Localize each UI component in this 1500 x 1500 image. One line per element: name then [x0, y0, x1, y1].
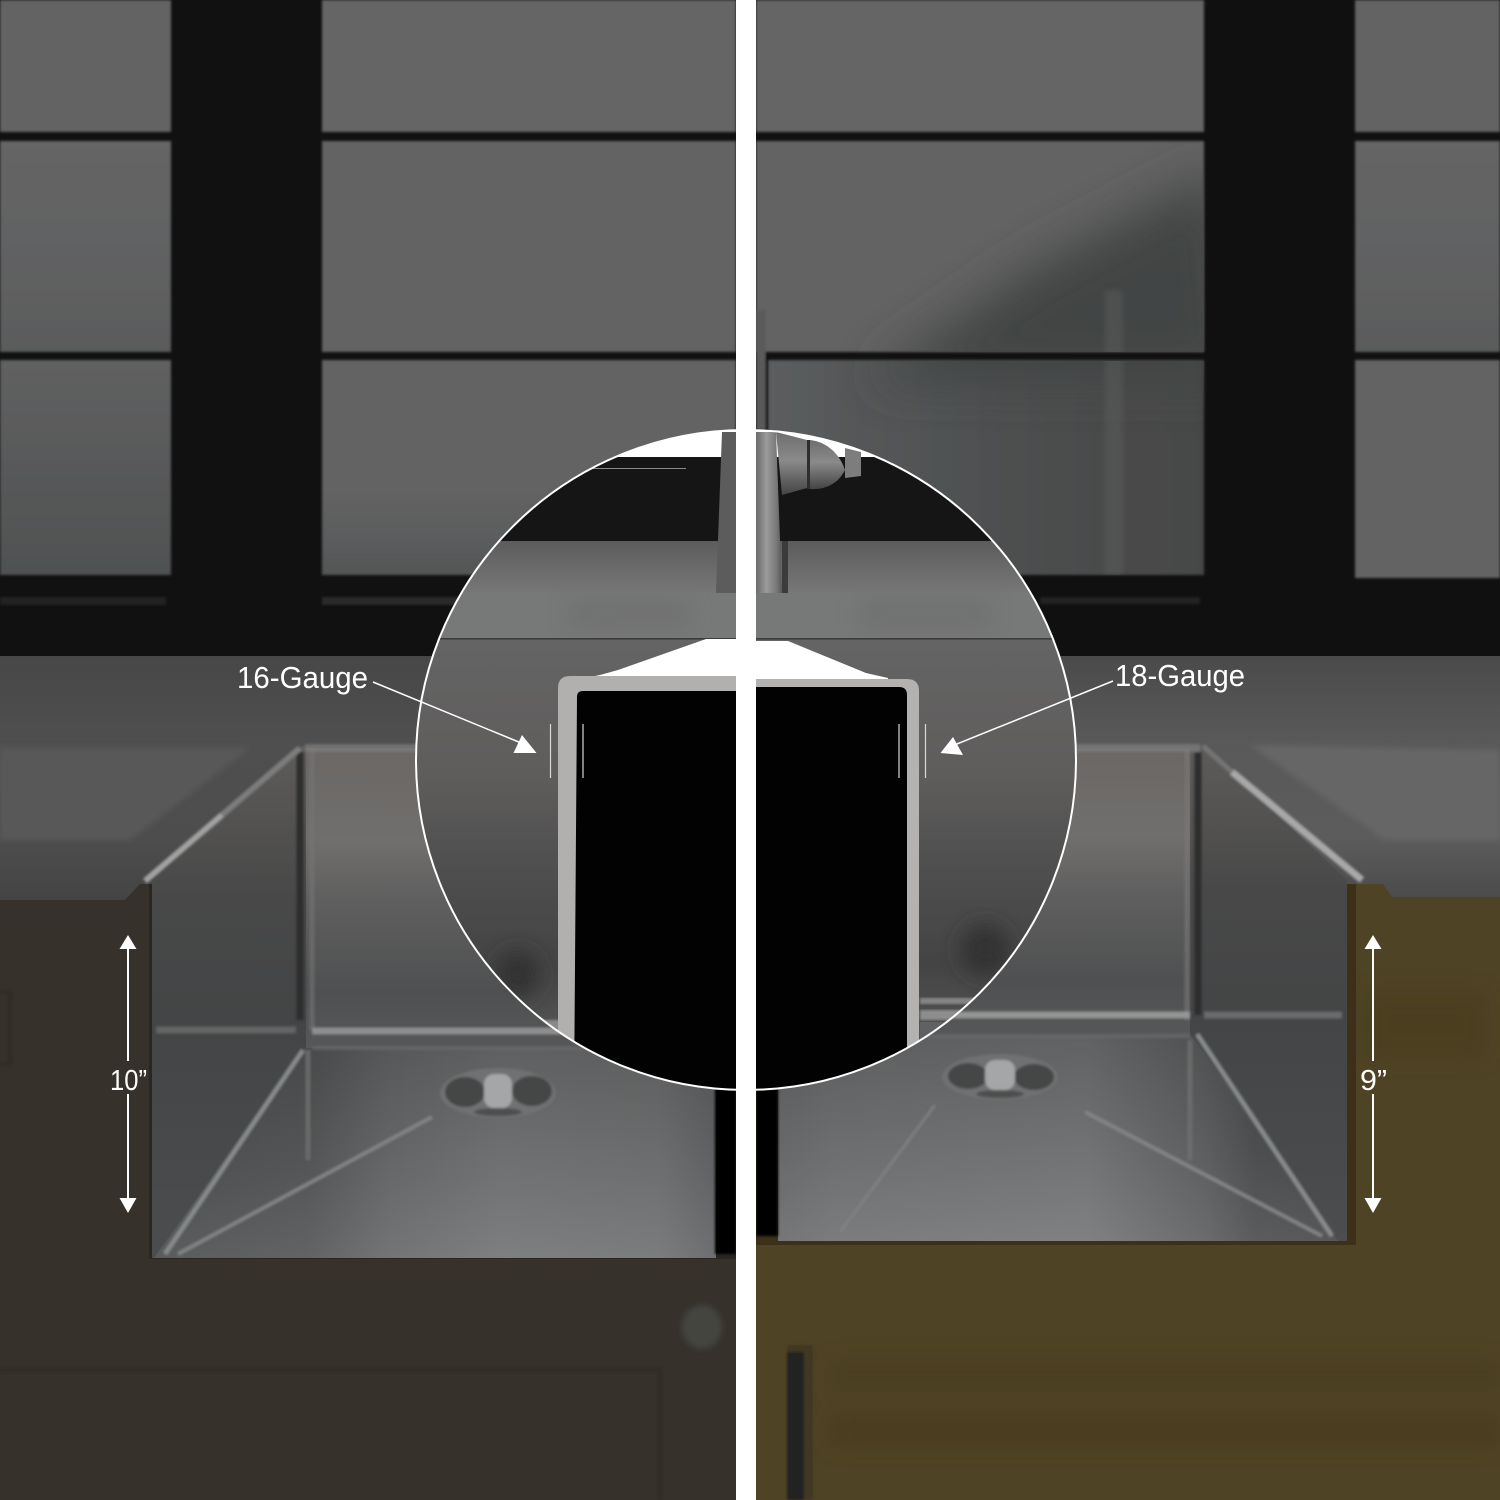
sink side wall [152, 746, 306, 1258]
arrow: 16-gauge pointer [373, 682, 536, 753]
countertop [1060, 656, 1500, 897]
dimension: 9 inch depth: 9” [1360, 1065, 1387, 1097]
sink back wall [929, 751, 1190, 1036]
arrow: 18-gauge pointer [940, 681, 1113, 755]
lens base fill [440, 640, 1052, 641]
thickness tick marks [550, 724, 926, 778]
cabinet grain [830, 992, 1500, 1447]
sink floor [154, 1048, 716, 1258]
16-gauge cross-section wall [558, 676, 736, 1100]
center divider [736, 0, 756, 1500]
faucet behind lens [756, 310, 766, 430]
dimension: 10 inch depth: 10” [110, 1065, 147, 1097]
scene: right half, 18-gauge kitchen [756, 0, 1500, 1500]
sink side wall [1190, 745, 1347, 1241]
faucet fitting [776, 432, 861, 495]
window frame [0, 0, 736, 665]
window reflection shadow [896, 170, 1204, 575]
lens counter texture [570, 600, 990, 628]
sink drain [440, 1068, 556, 1118]
lens sink rim details [420, 998, 1070, 1094]
dimension: 9 inch depth [1360, 935, 1387, 1213]
cabinet recessed panel [10, 992, 660, 1372]
countertop [0, 656, 432, 900]
faucet stem, left half [716, 432, 736, 593]
sink drain [942, 1054, 1058, 1100]
cabinet knob [682, 1305, 722, 1349]
sink cutout, 9 inch deep [756, 745, 1362, 1245]
magnifier lens: cross-section close-up [416, 430, 1076, 1100]
callout: 16-Gauge [237, 660, 536, 753]
faucet stem, right half [756, 432, 782, 593]
callout: 16-Gauge: 16-Gauge [237, 660, 368, 695]
cabinet handle [787, 1345, 813, 1500]
sink back wall [306, 748, 582, 1048]
sink floor [778, 1036, 1338, 1241]
lower cabinet [0, 884, 736, 1500]
lens white top cap [618, 431, 874, 457]
window frame [756, 0, 1500, 665]
lens lower wall [416, 640, 1076, 1090]
lens upper highlight line [590, 468, 686, 469]
window panes [0, 0, 736, 605]
dimension: 10 inch depth [110, 935, 147, 1213]
sink rim flange: white wedge [575, 639, 736, 680]
sink seams [142, 743, 582, 1256]
countertop highlight [0, 748, 250, 840]
callout: 18-Gauge: 18-Gauge [1115, 658, 1245, 693]
18-gauge cross-section wall [756, 679, 919, 1100]
sink cutout, 10 inch deep [145, 746, 736, 1259]
lower cabinet, oak [756, 884, 1500, 1500]
countertop highlight [1250, 745, 1500, 840]
lens counter line [416, 638, 1076, 640]
sink seams [859, 744, 1365, 1238]
lens counter edge [440, 595, 1052, 638]
lens dark window band [500, 457, 992, 541]
scene: left half, 16-gauge kitchen [0, 0, 736, 1500]
sink front dark gap [713, 1090, 736, 1256]
window panes [756, 0, 1500, 604]
callout: 18-Gauge [940, 658, 1245, 755]
lens outline [416, 430, 1076, 1090]
sink front dark gap [756, 1090, 780, 1238]
lens lower-wall shadows [496, 924, 1009, 999]
lens backsplash [462, 541, 1030, 593]
